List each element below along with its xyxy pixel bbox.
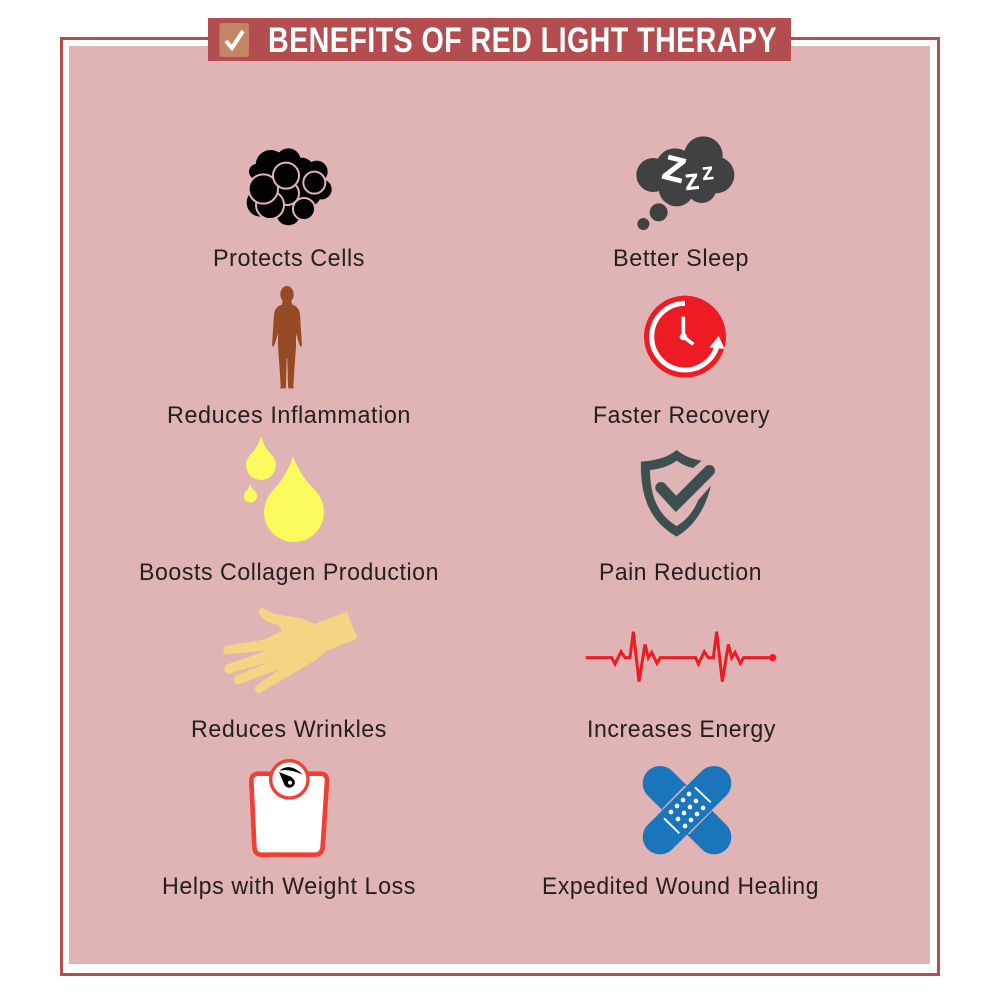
label: Faster Recovery (593, 402, 770, 429)
benefit: boosts collagen production (139, 436, 439, 586)
icon: sleep cloud: Z (659, 148, 689, 191)
icon: crossed bandages (660, 783, 714, 837)
benefit: faster recovery (593, 296, 770, 429)
benefit: reduces wrinkles (191, 608, 387, 743)
title: BENEFITS OF RED LIGHT THERAPY (268, 21, 777, 60)
icon: human body (272, 286, 302, 388)
label: Increases Energy (587, 716, 776, 743)
benefit: helps with weight loss (162, 761, 416, 900)
benefit: pain reduction (599, 450, 762, 586)
icon: cell cluster (247, 148, 332, 225)
label: Reduces Inflammation (167, 402, 411, 429)
icon: checkbox (220, 23, 249, 57)
icon: sleep cloud: Z (684, 169, 700, 195)
icon: clock with arrow (644, 296, 726, 378)
icon: sleep cloud (636, 136, 734, 230)
main panel (69, 46, 930, 964)
label: Reduces Wrinkles (191, 716, 387, 743)
benefit: increases energy (586, 632, 776, 743)
benefit: expedited wound healing (542, 783, 819, 900)
label: Pain Reduction (599, 559, 762, 586)
icon: hand (223, 608, 358, 693)
icon: sleep cloud: Z (701, 163, 714, 184)
icon: shield with check (641, 450, 711, 537)
label: Boosts Collagen Production (139, 559, 439, 586)
icon: heartbeat line (586, 632, 776, 682)
label: Better Sleep (613, 245, 749, 272)
icon: drops (244, 436, 324, 542)
label: Helps with Weight Loss (162, 873, 416, 900)
icon: weighing scale (251, 761, 327, 855)
title banner (208, 18, 791, 61)
benefit: reduces inflammation (167, 286, 411, 429)
benefit: better sleep (613, 136, 749, 272)
label: Expedited Wound Healing (542, 873, 819, 900)
label: Protects Cells (213, 245, 365, 272)
benefit: protects cells (213, 148, 365, 272)
